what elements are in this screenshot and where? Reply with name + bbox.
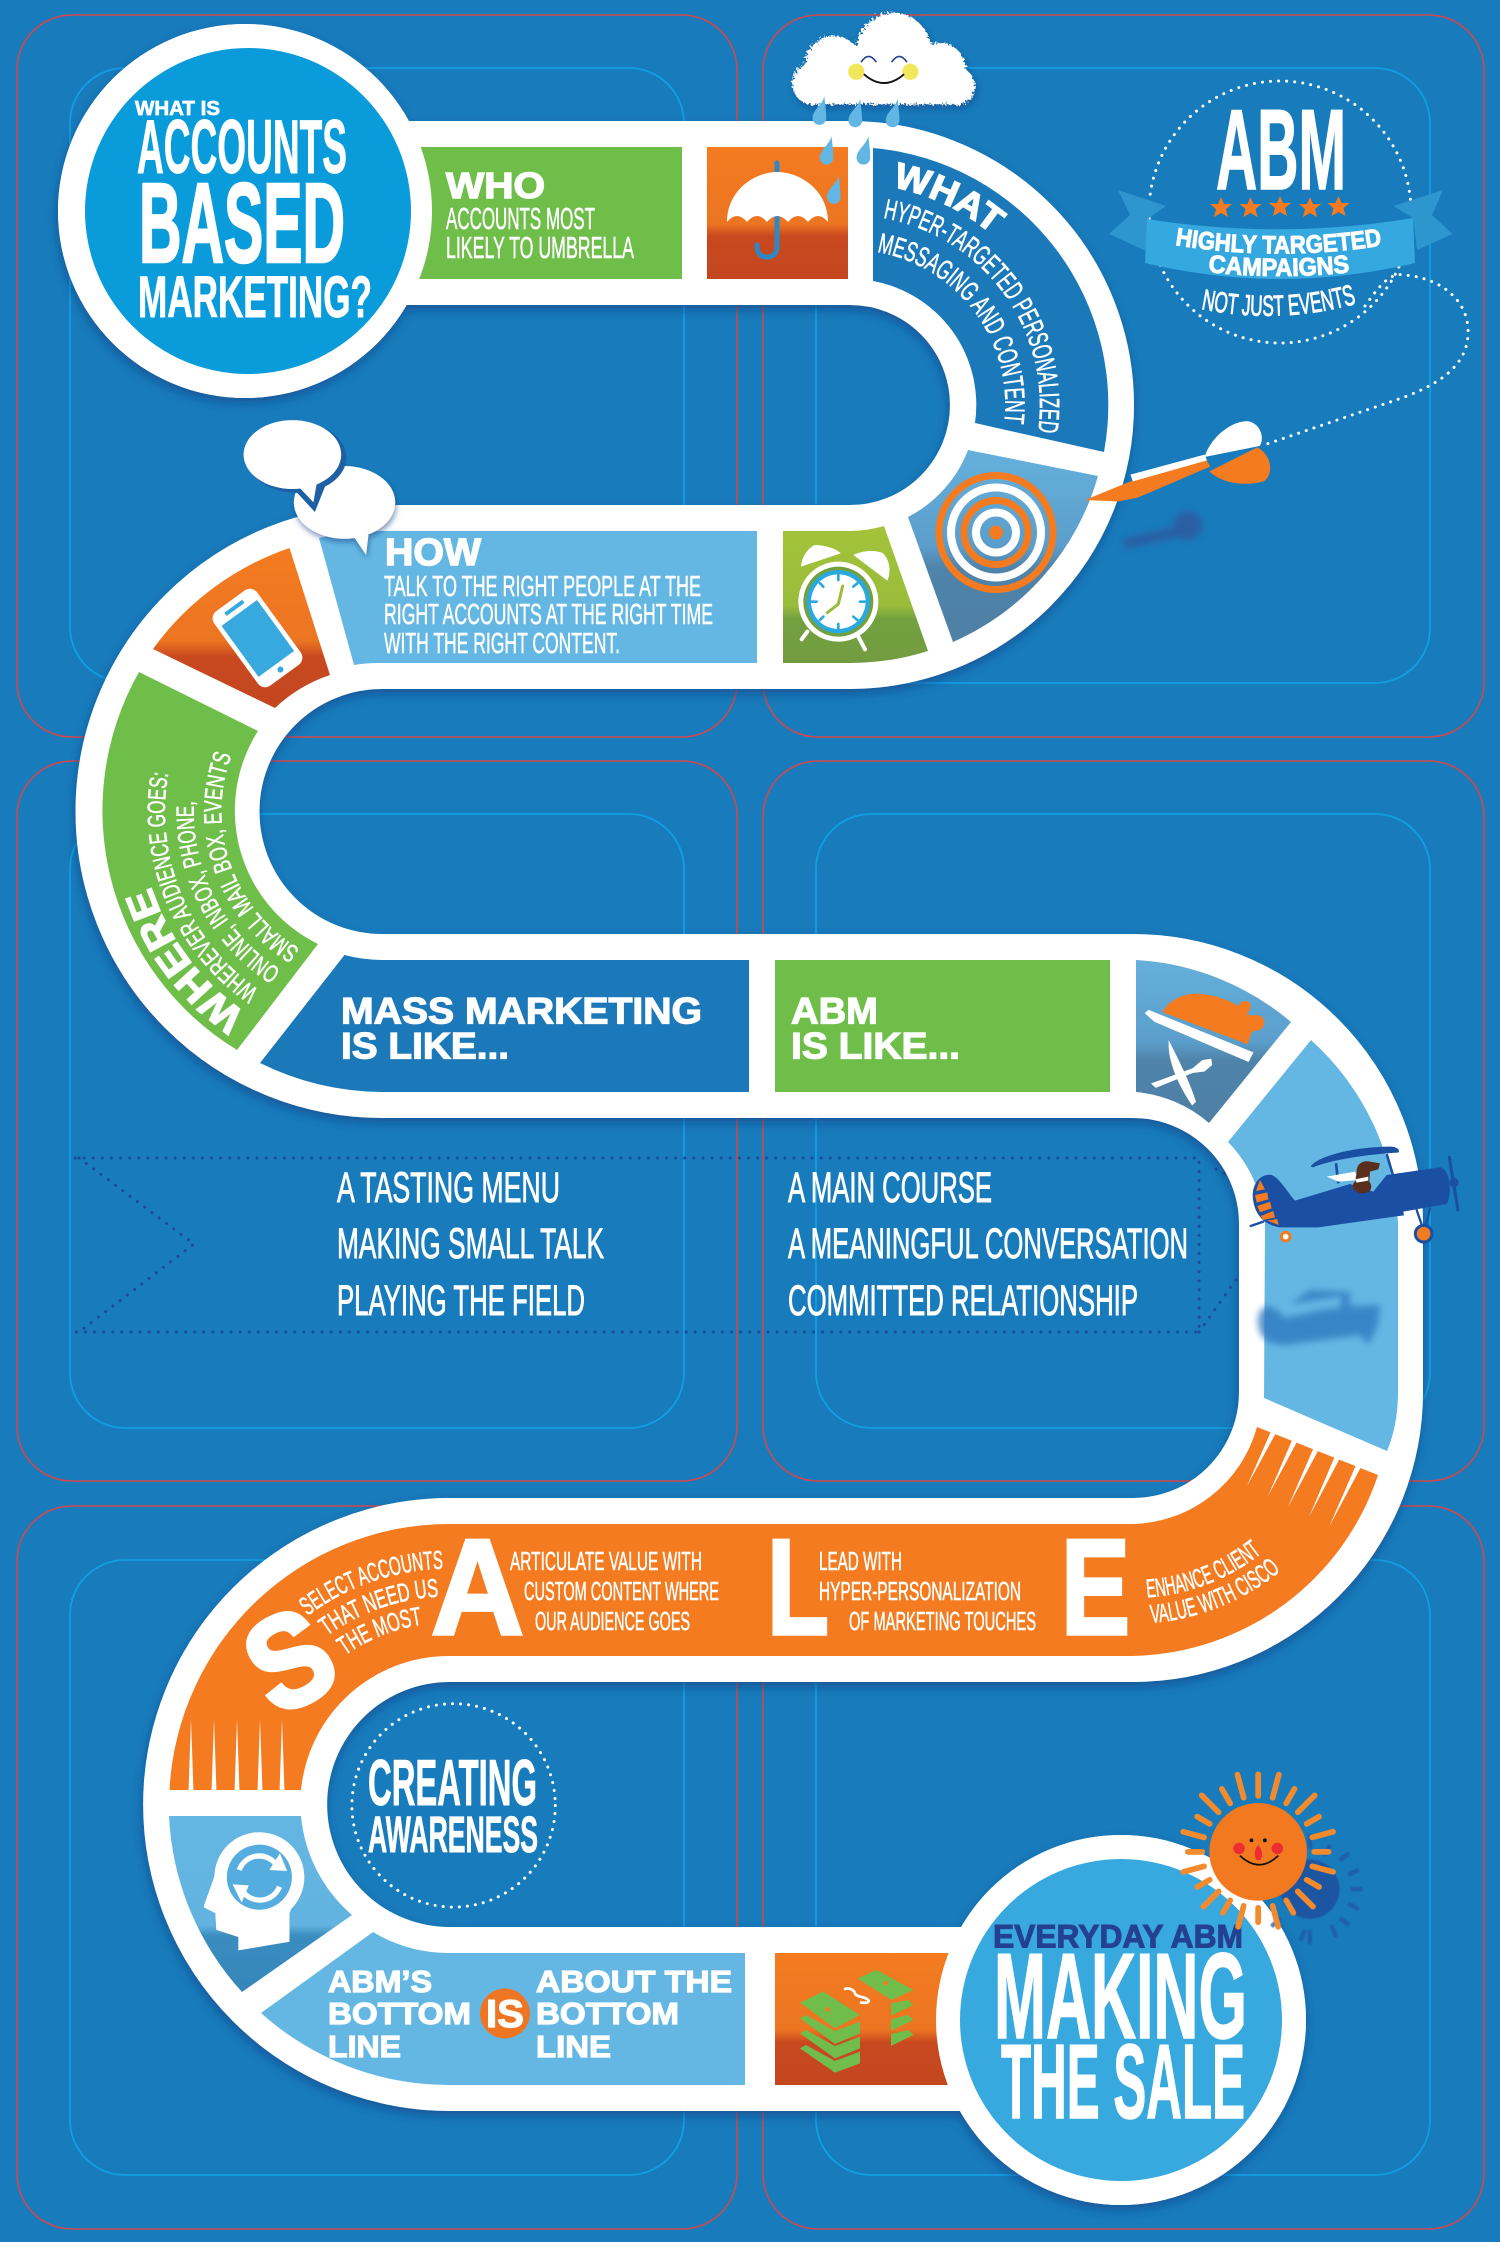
text: mass marketing is like: IS LIKE... [341, 1026, 509, 1066]
text: sale letters and descriptions: LEAD WITH [819, 1546, 902, 1576]
text: who [446, 165, 634, 265]
icon: speech bubbles [244, 420, 395, 555]
dotted banner behind comparison list [75, 1158, 1269, 1332]
text: everyday abm making the sale: MAKING [994, 1928, 1247, 2064]
text: abms bottom line is about the bottom line: LINE [536, 2029, 611, 2064]
comparison list: mass marketing: MAKING SMALL TALK [337, 1220, 604, 1268]
text: abm is like: IS LIKE... [791, 1026, 960, 1066]
text: abms bottom line is about the bottom line: BOTTOM [328, 1996, 471, 2031]
text: sale letters and descriptions: THAT NEED US [316, 1578, 438, 1634]
segment: money tile [775, 1953, 955, 2085]
text: where [125, 752, 298, 1036]
text: who: ACCOUNTS MOST [446, 201, 595, 236]
segment: bottom line [261, 1932, 745, 2085]
end circle [936, 1835, 1306, 2205]
text: who: LIKELY TO UMBRELLA [446, 230, 634, 265]
text: where: ONLINE, INBOX, PHONE, [176, 802, 278, 982]
icon: biplane with dog pilot [1251, 1147, 1459, 1242]
comparison list: abm: COMMITTED RELATIONSHIP [788, 1277, 1138, 1325]
text: abms bottom line is about the bottom line: BOTTOM [536, 1996, 679, 2031]
comparison list: mass marketing [337, 1164, 604, 1325]
segment: where [102, 672, 318, 1050]
text: sale letters and descriptions: ARTICULATE VALUE WITH [510, 1546, 702, 1576]
segment: mass marketing [260, 955, 749, 1092]
title: what is accounts based marketing: MARKETING? [138, 265, 372, 330]
segment: who [415, 147, 682, 279]
segment: head tile [169, 1816, 352, 1992]
text: abms bottom line is about the bottom line: LINE [328, 2029, 401, 2064]
text: where: WHEREVER AUDIENCE GOES: [147, 772, 256, 1004]
plane shadow [1258, 1290, 1380, 1345]
title: what is accounts based marketing: WHAT IS [135, 98, 220, 120]
text: where: SMALL MAIL BOX, EVENTS [204, 752, 298, 962]
icon: head with refresh arrows [204, 1832, 304, 1950]
text: mass marketing is like [341, 990, 702, 1066]
segment: how [319, 531, 757, 665]
icon: smiling sun with shadow [1183, 1774, 1362, 1944]
text: sale letters and descriptions: A [431, 1511, 524, 1663]
badge: creating awareness [352, 1704, 555, 1907]
text: sale letters and descriptions: OF MARKETING TOUCHES [849, 1606, 1036, 1636]
segment: target tile [908, 450, 1098, 642]
text: sale letters and descriptions: THE MOST [335, 1606, 420, 1654]
icon: umbrella [727, 163, 828, 257]
comparison list: mass marketing: A TASTING MENU [337, 1164, 560, 1212]
icon: money stacks [800, 1970, 913, 2073]
dart flight path [1264, 275, 1468, 445]
text: what: HYPER-TARGETED PERSONALIZED [884, 199, 1060, 433]
segment: sale [170, 1427, 1378, 1790]
text: sale letters and descriptions: S [221, 1577, 358, 1743]
comparison list: abm: A MEANINGFUL CONVERSATION [788, 1220, 1188, 1268]
text: sale letters and descriptions: E [1061, 1511, 1130, 1663]
comparison list: mass marketing: PLAYING THE FIELD [337, 1277, 585, 1325]
text: what: MESSAGING AND CONTENT [878, 233, 1025, 424]
segment: phone tile [153, 548, 330, 708]
text: sale letters and descriptions: VALUE WITH CISCO [1149, 1559, 1278, 1623]
title: what is accounts based marketing [135, 98, 372, 330]
badge: abm highly targeted campaigns [1109, 80, 1452, 344]
icon: roast dinner [1145, 994, 1264, 1106]
text: where: WHERE [125, 887, 240, 1036]
text: everyday abm making the sale: EVERYDAY ABM [993, 1918, 1243, 1954]
text: sale letters and descriptions: ENHANCE CLIENT [1146, 1538, 1260, 1598]
badge: abm highly targeted campaigns: ABM [1216, 87, 1346, 214]
comparison list: abm [788, 1164, 1188, 1325]
text: what: WHAT [898, 162, 1008, 230]
text: who: WHO [446, 165, 545, 206]
badge: abm highly targeted campaigns: NOT JUST EVENTS [1202, 284, 1355, 316]
text: mass marketing is like: MASS MARKETING [341, 990, 702, 1032]
text: how [384, 532, 713, 660]
text: sale letters and descriptions: OUR AUDIENCE GOES [535, 1606, 690, 1636]
text: sale letters and descriptions: SELECT ACCOUNTS [299, 1550, 442, 1614]
text: sale letters and descriptions: L [767, 1511, 829, 1663]
text: sale letters and descriptions: CUSTOM CONTENT WHERE [524, 1576, 719, 1606]
text: how: HOW [385, 532, 481, 574]
icon: smiling cloud with rain [792, 13, 975, 204]
segment: abm is like [775, 960, 1110, 1092]
text: how: RIGHT ACCOUNTS AT THE RIGHT TIME [384, 599, 713, 631]
text: abms bottom line is about the bottom line: ABOUT THE [536, 1964, 732, 1999]
badge: abm highly targeted campaigns: HIGHLY TARGETED [1176, 228, 1380, 254]
segment: plane tile [1228, 1040, 1398, 1451]
text: how: WITH THE RIGHT CONTENT. [384, 628, 620, 660]
segment: what [873, 148, 1108, 452]
text: abms bottom line is about the bottom line: ABM’S [328, 1964, 432, 1999]
text: abm is like [791, 990, 960, 1066]
text: how: TALK TO THE RIGHT PEOPLE AT THE [384, 571, 701, 603]
start circle [58, 24, 432, 398]
text: sale letters and descriptions [221, 1511, 1278, 1743]
text: abms bottom line is about the bottom line [328, 1964, 732, 2064]
comparison list: abm: A MAIN COURSE [788, 1164, 992, 1212]
badge: creating awareness: CREATING [368, 1746, 537, 1819]
text: everyday abm making the sale [993, 1918, 1247, 2141]
text: sale letters and descriptions: HYPER-PERSONALIZATION [819, 1576, 1021, 1606]
text: abm is like: ABM [791, 990, 878, 1032]
title: what is accounts based marketing: ACCOUNTS [137, 105, 347, 190]
segment: umbrella tile [707, 147, 848, 279]
segment: clock tile [783, 526, 928, 663]
badge: creating awareness: AWARENESS [368, 1806, 538, 1863]
icon: target [939, 476, 1053, 590]
icon: dart [1085, 421, 1270, 543]
icon: alarm clock [798, 545, 889, 649]
text: abms bottom line is about the bottom line: IS [486, 1993, 524, 2036]
title: what is accounts based marketing: BASED [139, 160, 345, 286]
badge: abm highly targeted campaigns: CAMPAIGNS [1209, 255, 1349, 276]
icon: phone [209, 585, 306, 691]
segment: food tile [1136, 960, 1291, 1123]
sale fringe: left and right ends [188, 1429, 1361, 1792]
